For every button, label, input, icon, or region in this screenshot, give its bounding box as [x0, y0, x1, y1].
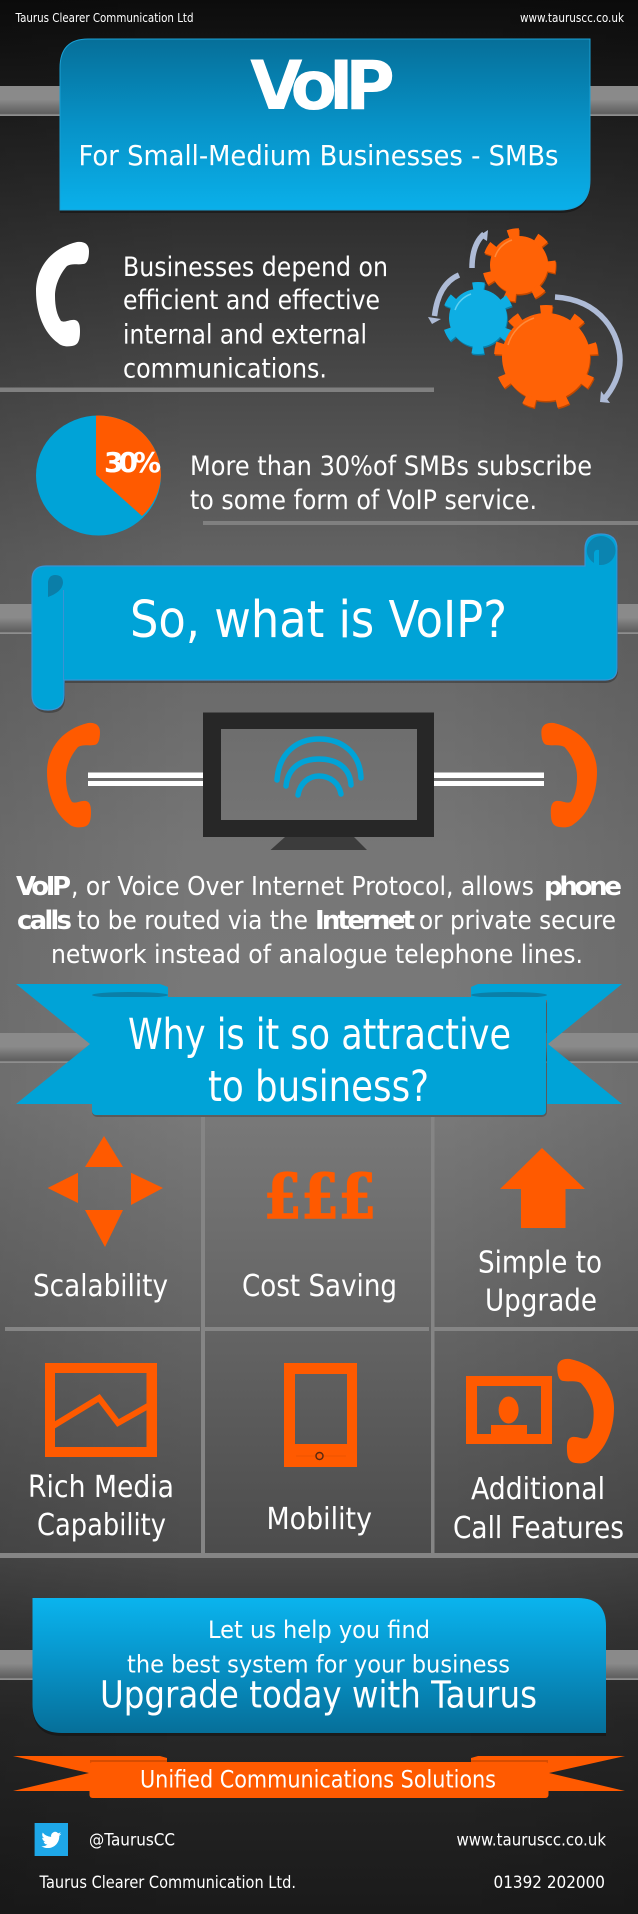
icon: mobile device [284, 1363, 357, 1467]
ribbon text: Unified Communications Solutions [140, 1766, 496, 1794]
paragraph: VoIP definition: Internet [315, 906, 415, 936]
icon: gears with arrows [428, 228, 620, 413]
paragraph: VoIP definition: , or Voice Over Internet Protocol, allows [71, 872, 534, 902]
big orange gear [492, 303, 601, 413]
paragraph: VoIP definition: network instead of analogue telephone lines. [51, 940, 583, 970]
text block: businesses depend: efficient and effective [123, 285, 380, 316]
icon: right phone [541, 723, 597, 827]
call to action text: Let us help you find [208, 1616, 430, 1644]
call to action text [100, 1616, 537, 1717]
label: Scalability [33, 1269, 168, 1304]
diagram: VoIP call over network [47, 712, 597, 850]
label: Capability [37, 1508, 166, 1543]
paragraph: VoIP definition: calls [17, 906, 72, 936]
icon: wifi arcs [277, 739, 361, 795]
label: Mobility [266, 1502, 372, 1537]
benefits grid lines [0, 1117, 638, 1558]
icon: up arrow [500, 1148, 585, 1228]
call to action text: the best system for your business [127, 1651, 510, 1679]
label [478, 1246, 602, 1319]
label [453, 1472, 624, 1546]
small orange gear [482, 228, 557, 304]
top line: website: www.tauruscc.co.uk [520, 11, 624, 25]
panel: cost saving [242, 1160, 397, 1304]
paragraph: VoIP definition: phone [544, 872, 622, 902]
paragraph: VoIP definition: VoIP [16, 872, 71, 902]
orange ribbon [13, 1756, 625, 1798]
panel: scalability [33, 1136, 168, 1304]
call to action banner [0, 1598, 638, 1736]
text block: businesses depend: Businesses depend on [123, 252, 388, 283]
panel: mobility [266, 1363, 372, 1537]
banner: scroll, so what is VoIP [0, 534, 638, 713]
text block: 30 percent: to some form of VoIP service. [190, 485, 537, 516]
icon: video call with phone [466, 1359, 614, 1463]
footer: website: www.tauruscc.co.uk [456, 1831, 606, 1851]
label: Cost Saving [242, 1269, 397, 1304]
banner: ribbon, why attractive [0, 984, 638, 1117]
header banner [0, 39, 638, 213]
text block: 30 percent [190, 451, 592, 516]
text block: 30 percent: More than 30%of SMBs subscribe [190, 451, 592, 482]
blue gear [436, 276, 521, 362]
label: Additional [471, 1472, 605, 1507]
subtitle: For Small-Medium Businesses - SMBs [78, 139, 558, 172]
wires [88, 772, 544, 786]
icon: white phone [36, 242, 89, 346]
heading: So, what is VoIP? [130, 591, 507, 650]
icon: left phone [47, 723, 100, 827]
pie chart: 30% [36, 416, 161, 536]
label: Upgrade [485, 1284, 597, 1319]
heading: Why is it so attractive [128, 1010, 511, 1060]
rotation arrows [434, 234, 620, 399]
icon: pound signs: £££ [264, 1160, 376, 1233]
footer: company name: Taurus Clearer Communication Ltd. [39, 1873, 296, 1893]
banner: ribbon, why attractive: to business? [208, 1062, 429, 1112]
panel: rich media [28, 1363, 174, 1543]
call to action text: Upgrade today with Taurus [100, 1674, 537, 1717]
panel: simple to upgrade [478, 1148, 602, 1319]
panel: additional call features [453, 1359, 624, 1546]
text block: businesses depend [123, 252, 388, 384]
icon: four-way arrows [48, 1136, 163, 1247]
paragraph: VoIP definition [16, 872, 622, 970]
label: Simple to [478, 1246, 602, 1281]
pie label: 30% [104, 446, 161, 479]
paragraph: VoIP definition: or private secure [419, 906, 616, 936]
icon: chart frame [45, 1363, 157, 1457]
text block: businesses depend: internal and external [123, 320, 367, 350]
top line: company name: Taurus Clearer Communication Ltd [15, 11, 194, 25]
icon: monitor [203, 712, 434, 850]
paragraph: VoIP definition: to be routed via the [77, 906, 308, 936]
label [28, 1470, 174, 1543]
text block: businesses depend: communications. [123, 354, 327, 384]
label: Rich Media [28, 1470, 174, 1505]
footer: phone number: 01392 202000 [494, 1873, 605, 1893]
title: VoIP [250, 47, 395, 126]
footer: twitter handle: @TaurusCC [89, 1831, 175, 1851]
icon: twitter [35, 1823, 68, 1856]
